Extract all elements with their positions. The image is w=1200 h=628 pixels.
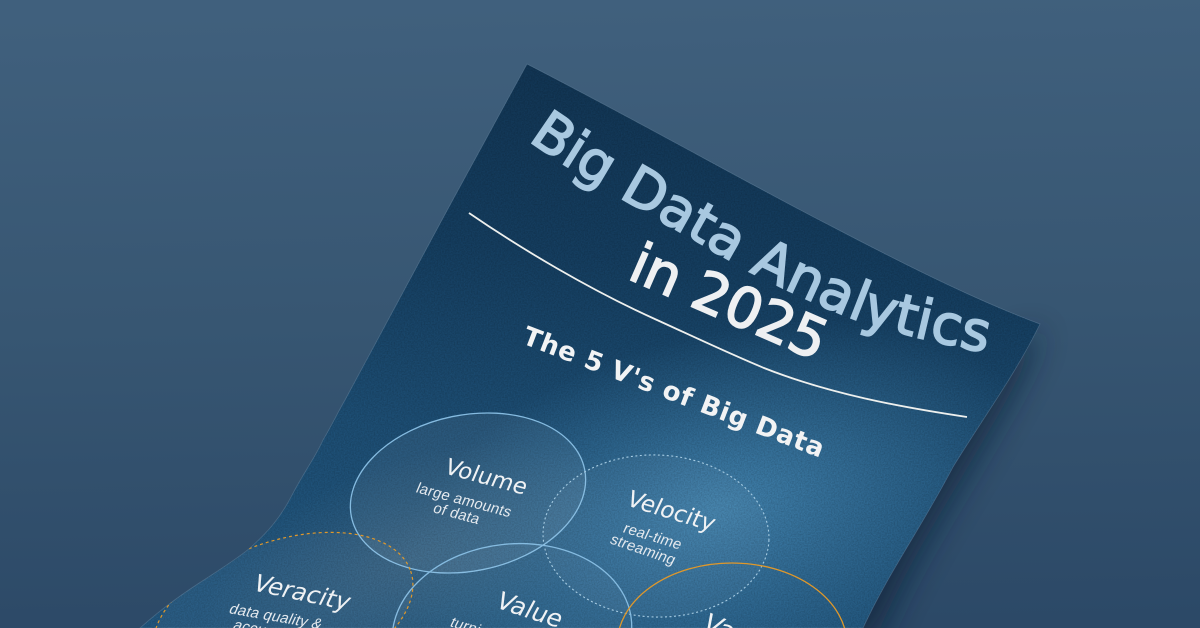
paper shadow [800, 330, 1040, 628]
label: Volume: Volume [441, 455, 532, 500]
circle: Volume [350, 412, 586, 574]
label: Velocity: Velocity [622, 487, 720, 537]
description: Volume: large amounts [413, 480, 514, 521]
circle: Veracity [156, 532, 414, 628]
circle: Value [392, 542, 632, 628]
circle: Variety [617, 563, 847, 628]
description line: Velocity: streaming [607, 531, 679, 569]
poster sheet [140, 64, 1040, 628]
description line: Volume: of data [430, 500, 483, 528]
title line 2: in 2025 [620, 231, 837, 374]
circle: Velocity [540, 451, 772, 621]
title line 1: Big Data Analytics [531, 109, 990, 352]
label: Veracity: Veracity [248, 569, 356, 616]
divider curve [469, 213, 967, 417]
description: Velocity: real-time [620, 520, 685, 553]
subtitle: The 5 V's of Big Data [518, 322, 829, 465]
